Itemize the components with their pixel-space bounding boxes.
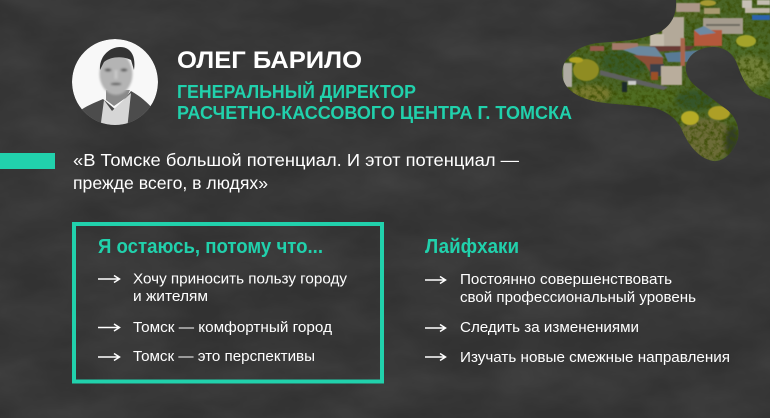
name heading: ОЛЕГ БАРИЛО [177,47,362,74]
life hacks list: свой профессиональный уровень [460,289,696,306]
quote [73,150,520,193]
job title [177,81,572,123]
buildings [676,3,700,12]
reasons list: Хочу приносить пользу городу [133,270,347,288]
portrait photo [72,39,158,130]
quote: «В Томске большой потенциал. И этот потенциал — [73,150,520,170]
quote: прежде всего, в людях» [73,173,268,193]
hair [100,47,134,70]
reasons list: Томск — комфортный город [133,319,332,336]
job title: ГЕНЕРАЛЬНЫЙ ДИРЕКТОР [177,81,416,102]
life hacks list: Постоянно совершенствовать [460,271,672,288]
panel: reasons to stay [74,224,382,382]
jacket [82,91,150,125]
photo: city aerial view in blob shape [555,0,770,165]
life hacks list [460,271,730,366]
panel: life hacks [425,236,730,366]
arrow icons: reasons [98,276,120,360]
reasons list: и жителям [133,288,208,305]
heading: reasons: Я остаюсь, потому что... [98,236,323,258]
reasons list: Томск — это перспективы [133,348,315,365]
face [100,53,132,95]
shirt [101,93,131,125]
life hacks list: Следить за изменениями [460,319,639,336]
life hacks list: Изучать новые смежные направления [460,349,730,366]
accent bar [0,153,55,169]
job title: РАСЧЕТНО-КАССОВОГО ЦЕНТРА Г. ТОМСКА [177,103,572,123]
reasons list [133,270,347,365]
yellow trees [573,59,599,81]
arrow icons: life hacks [425,276,446,360]
heading: life hacks: Лайфхаки [425,236,519,258]
neck [106,90,130,106]
